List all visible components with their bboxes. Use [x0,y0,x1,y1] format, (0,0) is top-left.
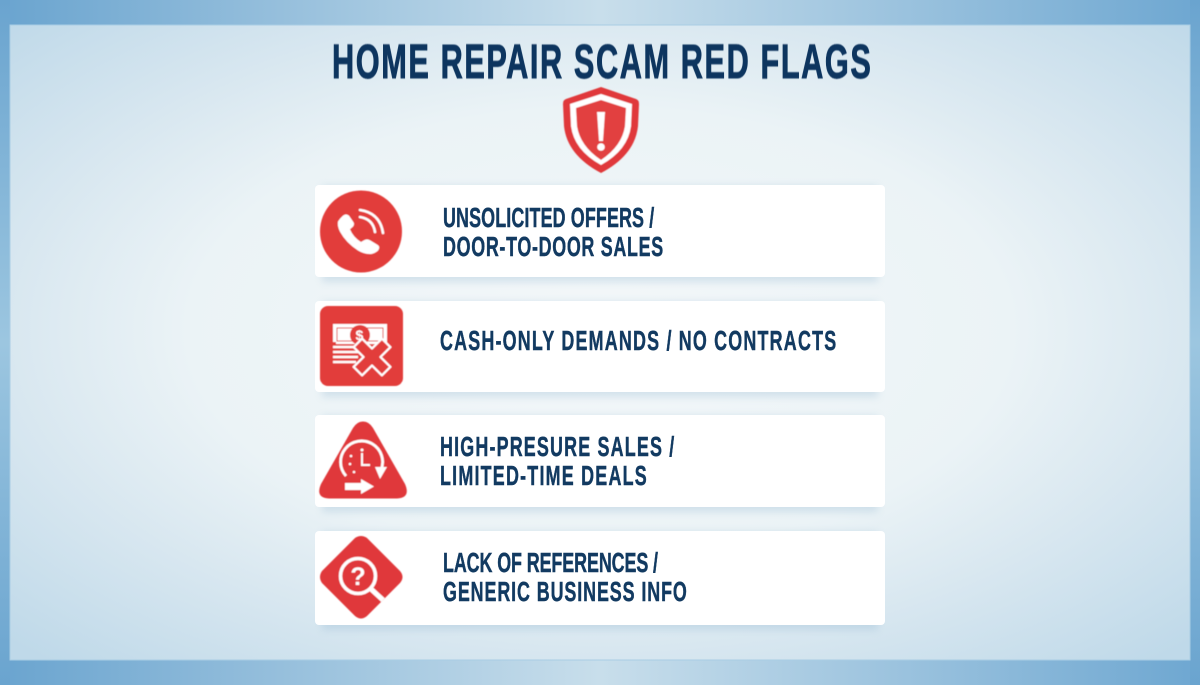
panel: lack of references [315,531,885,630]
label text: HIGH-PRESURE SALES / [440,431,675,462]
icon: magnifier in diamond [320,536,402,618]
card shadow and background [315,531,885,630]
title: HOME REPAIR SCAM RED FLAGS [332,35,871,89]
label text: GENERIC BUSINESS INFO [443,576,687,607]
panel: unsolicited offers [315,185,885,282]
icon: clock in triangle [319,422,407,498]
label text: DOOR-TO-DOOR SALES [443,231,663,262]
label text: LACK OF REFERENCES / [443,547,658,578]
label text: LIMITED-TIME DEALS [440,460,647,491]
label text [440,431,675,491]
icon: magnifier in diamond: ? [350,563,366,591]
icon: warning shield [563,87,639,173]
label text: CASH-ONLY DEMANDS / NO CONTRACTS [440,325,836,356]
panel: high-pressure sales [315,415,885,512]
label text: UNSOLICITED OFFERS / [443,202,655,233]
icon: cash with cross: $ [356,327,364,343]
card shadow and background [315,301,885,397]
card shadow and background [315,185,885,282]
panel: cash-only demands [315,301,885,397]
label text [443,202,663,262]
card shadow and background [315,415,885,512]
label text [443,547,687,607]
icon: phone [320,190,402,272]
icon: cash with cross [320,306,403,386]
